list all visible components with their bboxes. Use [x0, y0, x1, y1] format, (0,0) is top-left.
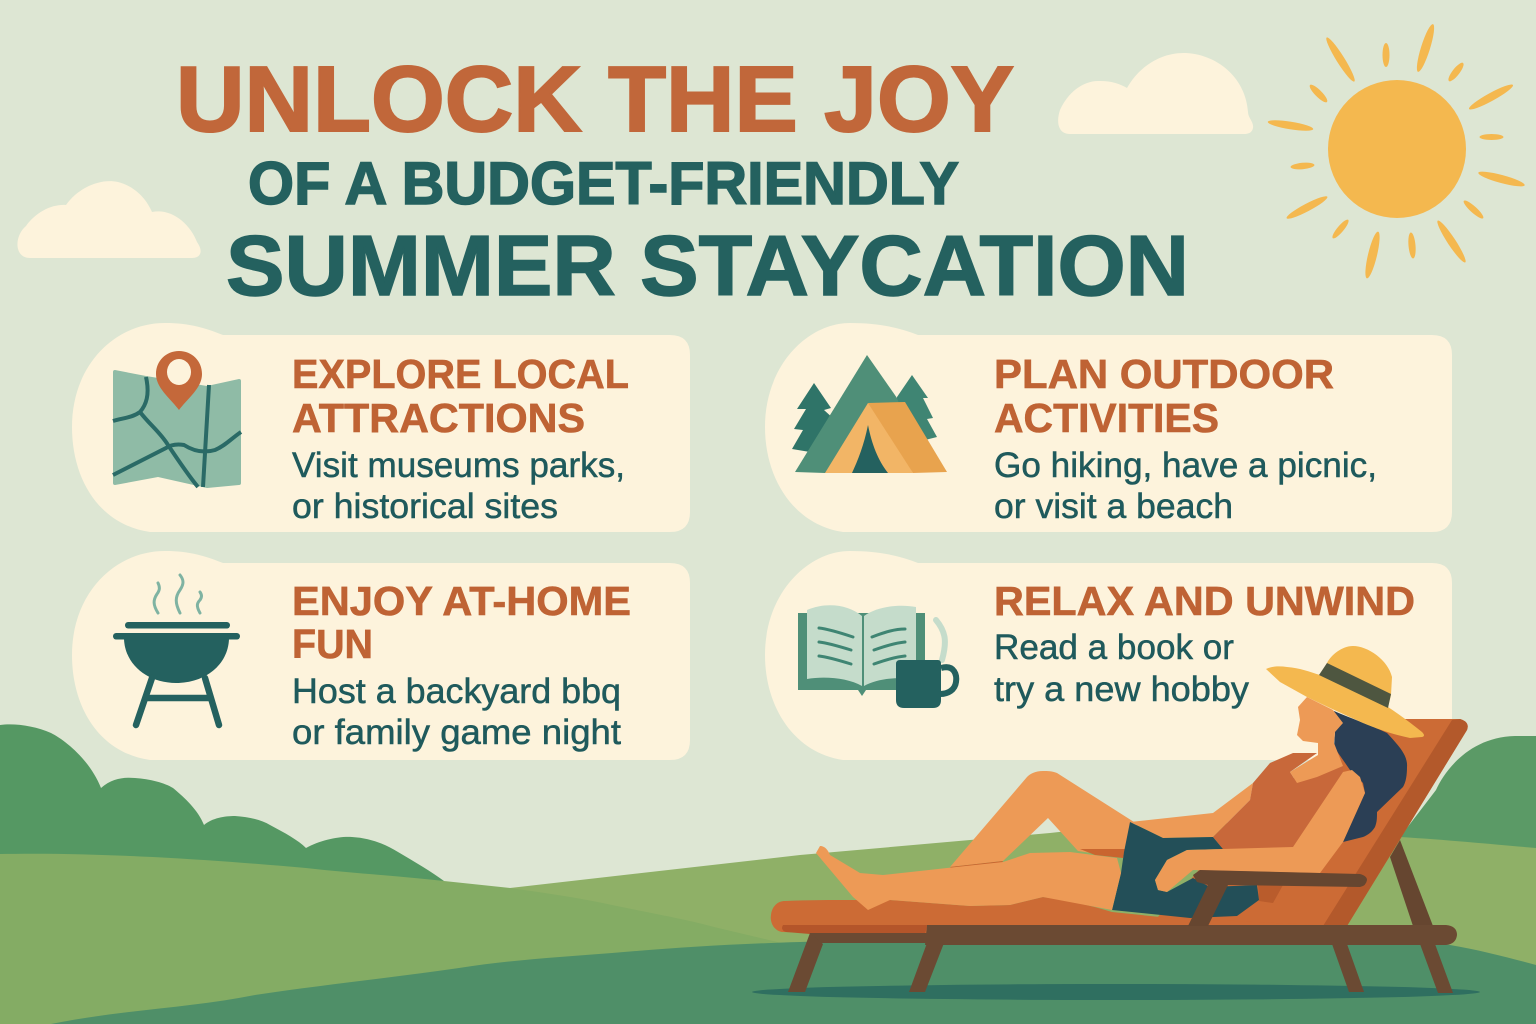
- text: plan outdoor activities: PLAN OUTDOOR: [994, 351, 1334, 397]
- icon: sun: [1267, 23, 1526, 279]
- person: near arm: [1155, 770, 1365, 892]
- cloud: right: [1058, 53, 1253, 134]
- lounger shadow: [752, 984, 1480, 1000]
- person: knee shadows: [950, 849, 1125, 868]
- text: enjoy at-home fun: FUN: [292, 621, 373, 667]
- text: plan outdoor activities: ACTIVITIES: [994, 395, 1219, 441]
- lounger: back rest: [1150, 719, 1468, 926]
- person: tank top: [1213, 753, 1343, 849]
- lounger: seat cushion: [771, 897, 1340, 935]
- person: shorts: [1112, 822, 1259, 918]
- icon: barbecue grill: [113, 575, 240, 725]
- panel: plan outdoor activities: [765, 323, 1452, 532]
- text: plan outdoor activities: [994, 351, 1377, 526]
- text: relax and unwind: RELAX AND UNWIND: [994, 578, 1415, 624]
- text: enjoy at-home fun: Host a backyard bbq: [292, 672, 621, 711]
- icon: tent and trees: [792, 355, 947, 473]
- text: explore local attractions: or historical sites: [292, 487, 558, 526]
- person: hair: [1334, 711, 1407, 842]
- title: OF A BUDGET-FRIENDLY: [248, 150, 959, 217]
- text: enjoy at-home fun: or family game night: [292, 713, 621, 752]
- text: explore local attractions: ATTRACTIONS: [292, 395, 585, 441]
- icon: map with pin: [113, 351, 241, 488]
- title: [176, 47, 1189, 314]
- panel: enjoy at-home fun: [72, 551, 690, 760]
- person: face and neck: [1290, 697, 1343, 783]
- person: sun hat: [1266, 646, 1424, 738]
- lounger: cushion underside: [782, 925, 927, 935]
- title: UNLOCK THE JOY: [176, 47, 1014, 151]
- lounger: arm rest: [1188, 870, 1367, 926]
- illustration: woman on sun lounger: [752, 646, 1480, 1000]
- icon: open book and mug: [798, 605, 956, 708]
- person: bent leg: [950, 771, 1134, 867]
- text: enjoy at-home fun: ENJOY AT-HOME: [292, 578, 631, 624]
- text: enjoy at-home fun: [292, 578, 631, 752]
- lounger: frame and legs: [788, 925, 1457, 993]
- panel: explore local attractions: [72, 323, 690, 532]
- text: relax and unwind: [994, 578, 1415, 709]
- text: explore local attractions: Visit museums parks,: [292, 446, 625, 485]
- landscape: hills: [0, 724, 1536, 1024]
- text: plan outdoor activities: or visit a beach: [994, 487, 1233, 526]
- text: explore local attractions: [292, 351, 629, 526]
- person: straight leg and foot: [816, 846, 1121, 910]
- text: plan outdoor activities: Go hiking, have a picnic,: [994, 446, 1377, 485]
- text: explore local attractions: EXPLORE LOCAL: [292, 351, 629, 397]
- panel: relax and unwind: [765, 551, 1452, 760]
- person: far arm: [1130, 783, 1253, 838]
- text: relax and unwind: try a new hobby: [994, 670, 1250, 709]
- lounger: rear support: [1390, 840, 1433, 926]
- cloud: left: [17, 181, 201, 258]
- title: SUMMER STAYCATION: [226, 219, 1189, 314]
- text: relax and unwind: Read a book or: [994, 628, 1234, 667]
